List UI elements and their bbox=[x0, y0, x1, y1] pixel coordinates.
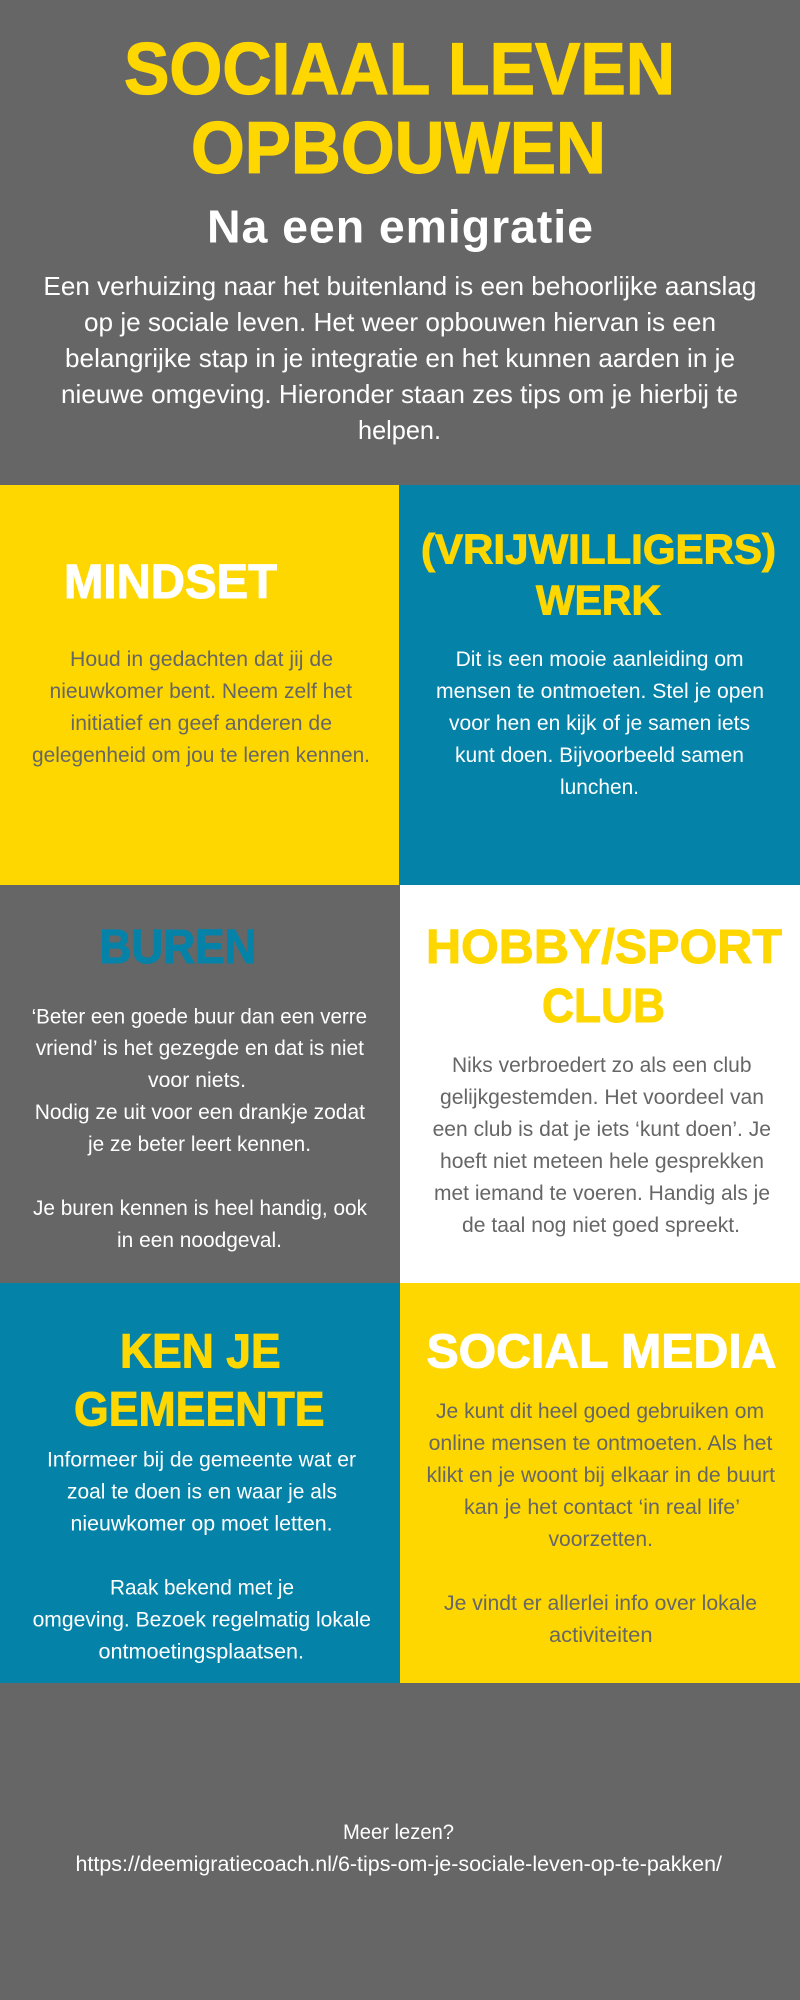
panel: ken je gemeente bbox=[0, 1283, 400, 1683]
body text: buren: je ze beter leert kennen. bbox=[87, 1133, 311, 1156]
body text: buren: Je buren kennen is heel handig, ook bbox=[33, 1197, 367, 1220]
body text: ken je gemeente bbox=[33, 1448, 371, 1664]
body text: hobby/sport club: de taal nog niet goed spreekt. bbox=[462, 1214, 740, 1237]
intro paragraph: op je sociale leven. Het weer opbouwen hiervan is een bbox=[84, 307, 716, 337]
body text: buren: ‘Beter een goede buur dan een verre bbox=[32, 1005, 367, 1028]
body text: vrijwilligerswerk: voor hen en kijk of je samen iets bbox=[449, 712, 750, 735]
footer link text: Meer lezen? bbox=[343, 1821, 454, 1844]
body text: buren: voor niets. bbox=[148, 1069, 246, 1092]
body text: mindset: gelegenheid om jou te leren kennen. bbox=[32, 744, 370, 767]
body text: social media: activiteiten bbox=[549, 1624, 652, 1647]
body text: ken je gemeente: Informeer bij de gemeente wat er bbox=[47, 1448, 356, 1472]
body text: ken je gemeente: ontmoetingsplaatsen. bbox=[98, 1640, 304, 1664]
panel: mindset bbox=[0, 485, 399, 885]
body text: vrijwilligerswerk: Dit is een mooie aanleiding om bbox=[456, 648, 744, 671]
title bbox=[124, 29, 675, 189]
body text: social media: Je vindt er allerlei info over lokale bbox=[444, 1592, 757, 1615]
body text: social media: Je kunt dit heel goed gebruiken om bbox=[436, 1400, 764, 1423]
body text: hobby/sport club: met iemand te voeren. Handig als je bbox=[434, 1182, 770, 1205]
body text: vrijwilligerswerk: kunt doen. Bijvoorbeeld samen bbox=[455, 744, 744, 767]
panel: social media bbox=[400, 1283, 800, 1683]
body text: social media: voorzetten. bbox=[548, 1528, 653, 1551]
intro paragraph: belangrijke stap in je integratie en het kunnen aarden in je bbox=[65, 343, 735, 373]
heading: social media: SOCIAL MEDIA bbox=[426, 1324, 776, 1378]
body text: vrijwilligerswerk bbox=[436, 648, 764, 799]
body text: vrijwilligerswerk: mensen te ontmoeten. Stel je open bbox=[436, 680, 764, 703]
body text: mindset bbox=[32, 648, 370, 767]
body text: mindset: initiatief en geef anderen de bbox=[70, 712, 332, 735]
heading: vrijwilligerswerk: (VRIJWILLIGERS) bbox=[421, 526, 776, 572]
body text: mindset: nieuwkomer bent. Neem zelf het bbox=[50, 680, 352, 703]
body text: buren: vriend’ is het gezegde en dat is niet bbox=[36, 1037, 364, 1060]
intro paragraph bbox=[43, 271, 756, 445]
intro paragraph: helpen. bbox=[358, 415, 441, 445]
footer link text: https://deemigratiecoach.nl/6-tips-om-je-sociale-leven-op-te-pakken/ bbox=[76, 1853, 722, 1876]
body text: social media: online mensen te ontmoeten. Als het bbox=[429, 1432, 773, 1455]
body text: hobby/sport club bbox=[433, 1054, 771, 1237]
heading: hobby/sport club: HOBBY/SPORT bbox=[426, 921, 782, 974]
body text: buren: Nodig ze uit voor een drankje zodat bbox=[35, 1101, 365, 1124]
body text: social media: klikt en je woont bij elkaar in de buurt bbox=[426, 1464, 775, 1487]
intro paragraph: Een verhuizing naar het buitenland is een behoorlijke aanslag bbox=[43, 271, 756, 301]
heading: vrijwilligerswerk: WERK bbox=[536, 576, 661, 624]
body text: buren: in een noodgeval. bbox=[117, 1229, 282, 1252]
body text: social media bbox=[426, 1400, 775, 1647]
panel: vrijwilligerswerk bbox=[399, 485, 800, 885]
body text: ken je gemeente: omgeving. Bezoek regelmatig lokale bbox=[33, 1608, 371, 1632]
panel: buren bbox=[0, 885, 400, 1283]
subtitle: Na een emigratie bbox=[207, 201, 593, 253]
heading: hobby/sport club bbox=[426, 921, 782, 1033]
panel: hobby/sport club bbox=[400, 885, 800, 1283]
body text: buren bbox=[32, 1005, 367, 1252]
heading: vrijwilligerswerk bbox=[421, 526, 776, 624]
footer link text bbox=[76, 1821, 722, 1876]
heading: buren: BUREN bbox=[100, 921, 256, 974]
body text: ken je gemeente: nieuwkomer op moet letten. bbox=[70, 1512, 332, 1536]
title: SOCIAAL LEVEN bbox=[124, 29, 675, 110]
body text: vrijwilligerswerk: lunchen. bbox=[560, 776, 639, 799]
heading: ken je gemeente: GEMEENTE bbox=[74, 1382, 324, 1436]
title: OPBOUWEN bbox=[191, 108, 606, 189]
body text: ken je gemeente: Raak bekend met je bbox=[110, 1576, 294, 1600]
heading: ken je gemeente: KEN JE bbox=[120, 1324, 281, 1378]
body text: hobby/sport club: een club is dat je iets ‘kunt doen’. Je bbox=[433, 1118, 771, 1141]
heading: hobby/sport club: CLUB bbox=[542, 980, 665, 1033]
heading: ken je gemeente bbox=[74, 1324, 324, 1436]
header section bbox=[43, 29, 756, 445]
body text: hobby/sport club: hoeft niet meteen hele gesprekken bbox=[440, 1150, 764, 1173]
body text: hobby/sport club: Niks verbroedert zo als een club bbox=[452, 1054, 752, 1077]
heading: mindset: MINDSET bbox=[64, 555, 277, 609]
body text: hobby/sport club: gelijkgestemden. Het voordeel van bbox=[440, 1086, 764, 1109]
body text: ken je gemeente: zoal te doen is en waar je als bbox=[67, 1480, 337, 1504]
intro paragraph: nieuwe omgeving. Hieronder staan zes tips om je hierbij te bbox=[61, 379, 738, 409]
body text: mindset: Houd in gedachten dat jij de bbox=[70, 648, 333, 671]
body text: social media: kan je het contact ‘in real life’ bbox=[464, 1496, 740, 1519]
